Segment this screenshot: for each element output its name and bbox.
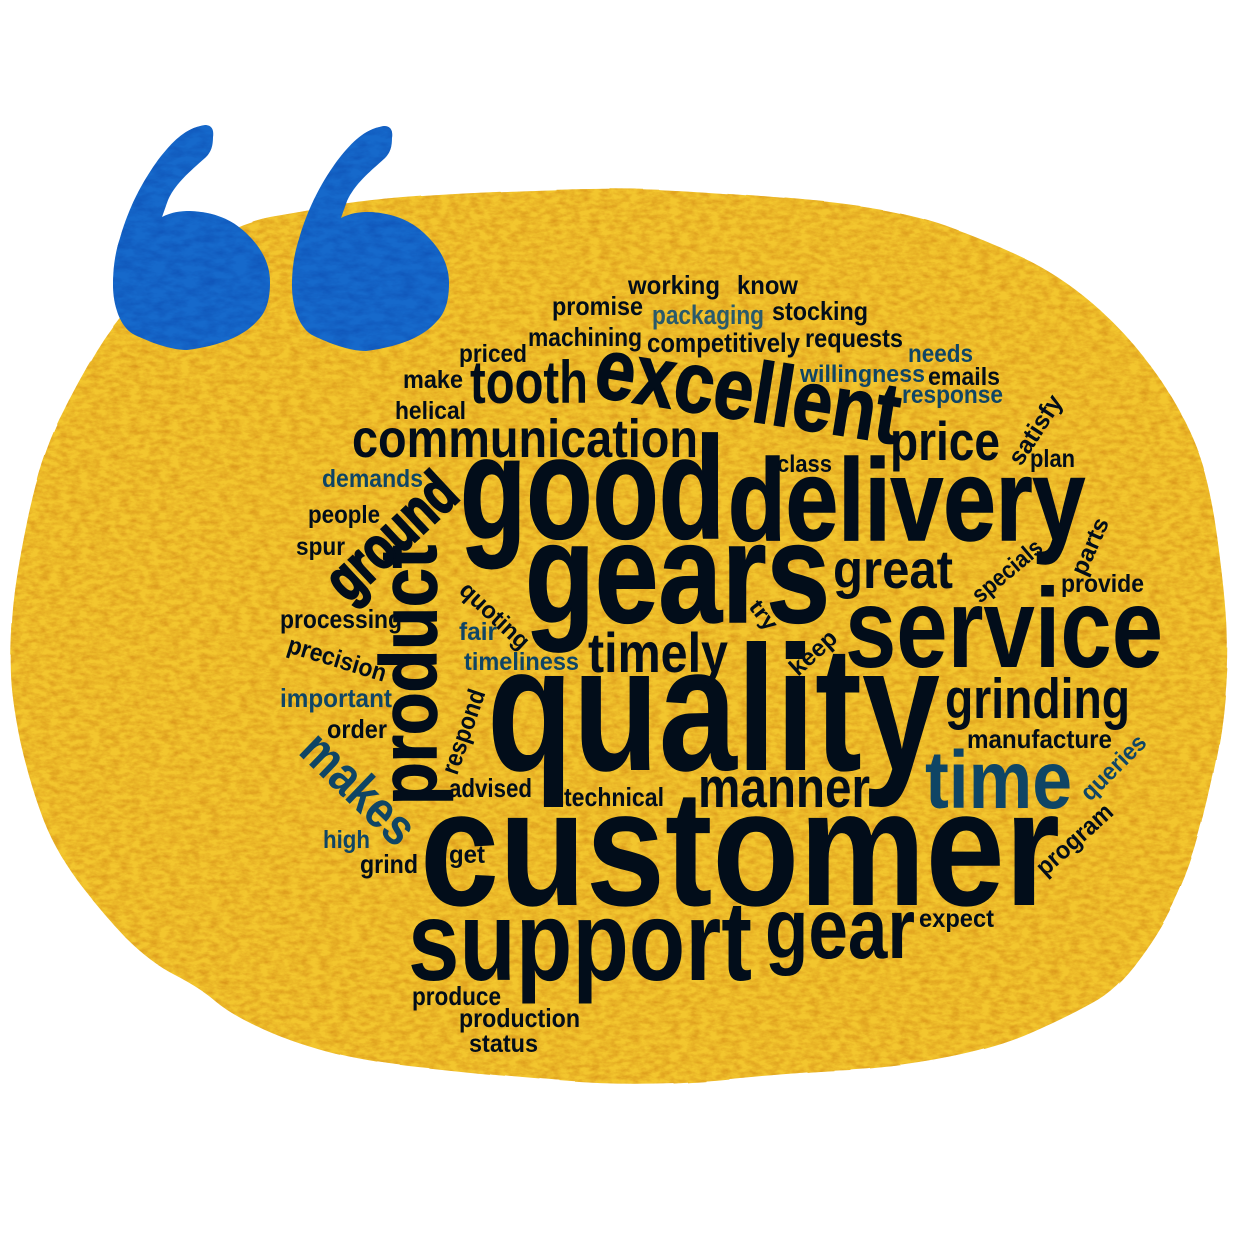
icon: blue quotation marks [113,125,449,351]
word: ground: ground [311,459,470,614]
word: make: make [403,366,463,394]
word: people: people [308,501,380,529]
word: get: get [449,841,486,869]
word: manner: manner [698,756,870,820]
word: quality: quality [487,609,940,808]
word: timeliness: timeliness [464,648,579,676]
word: status: status [469,1030,538,1058]
word: requests: requests [805,323,903,353]
word: response: response [902,381,1003,409]
word: keep: keep [784,625,843,681]
word: excellent: excellent [589,320,907,463]
word: promise: promise [552,291,643,321]
word: technical: technical [564,782,664,812]
word: communication: communication [352,409,698,469]
word: expect: expect [919,905,995,933]
word: order: order [327,714,387,744]
word: processing: processing [280,604,402,634]
word: demands: demands [322,465,423,493]
word: production: production [459,1003,580,1033]
word: tooth: tooth [470,349,588,416]
word: grinding: grinding [945,667,1130,731]
word: fair: fair [459,618,497,646]
icon: right quote mark [292,126,449,351]
word: know: know [737,270,799,300]
word: satisfy: satisfy [1003,390,1069,470]
word: queries: queries [1075,729,1152,806]
word: working: working [627,270,720,300]
word cloud [280,270,1163,1058]
word: class: class [777,451,832,478]
word: service: service [845,565,1163,691]
word: precision: precision [284,631,390,688]
word: quoting: quoting [454,577,535,655]
word: timely: timely [588,621,728,684]
word: gears: gears [525,494,830,653]
word: great: great [833,540,953,600]
word: advised: advised [449,773,532,803]
word: product: product [364,545,453,805]
word: program: program [1030,798,1119,881]
word: good: good [460,407,725,569]
word: support: support [408,878,752,1004]
word: produce: produce [412,981,501,1011]
word: helical: helical [395,397,466,425]
word: emails: emails [928,363,1000,391]
word: high: high [323,826,370,854]
word: customer: customer [420,756,1060,940]
word: important: important [280,683,392,713]
word: try: try [744,595,784,636]
panel: yellow paper speech bubble [11,189,1227,1084]
word: packaging: packaging [652,300,764,330]
word: respond: respond [436,686,491,778]
word: competitively: competitively [647,328,800,358]
word: plan: plan [1030,445,1075,473]
word: specials: specials [967,534,1048,609]
word: grind: grind [360,849,418,879]
word: provide: provide [1061,570,1144,598]
word: delivery: delivery [728,435,1085,565]
word: priced: priced [459,340,527,368]
word: manufacture: manufacture [967,724,1112,754]
word: parts: parts [1066,514,1115,579]
word: price: price [890,410,1000,472]
icon: left quote mark [113,125,270,350]
word: needs: needs [908,340,973,368]
word: spur: spur [296,533,345,561]
word: time: time [925,735,1072,826]
word: makes: makes [289,720,428,857]
word: willingness: willingness [799,361,925,388]
word: stocking: stocking [772,296,868,326]
word: machining: machining [528,322,642,352]
word: gear: gear [765,882,915,977]
